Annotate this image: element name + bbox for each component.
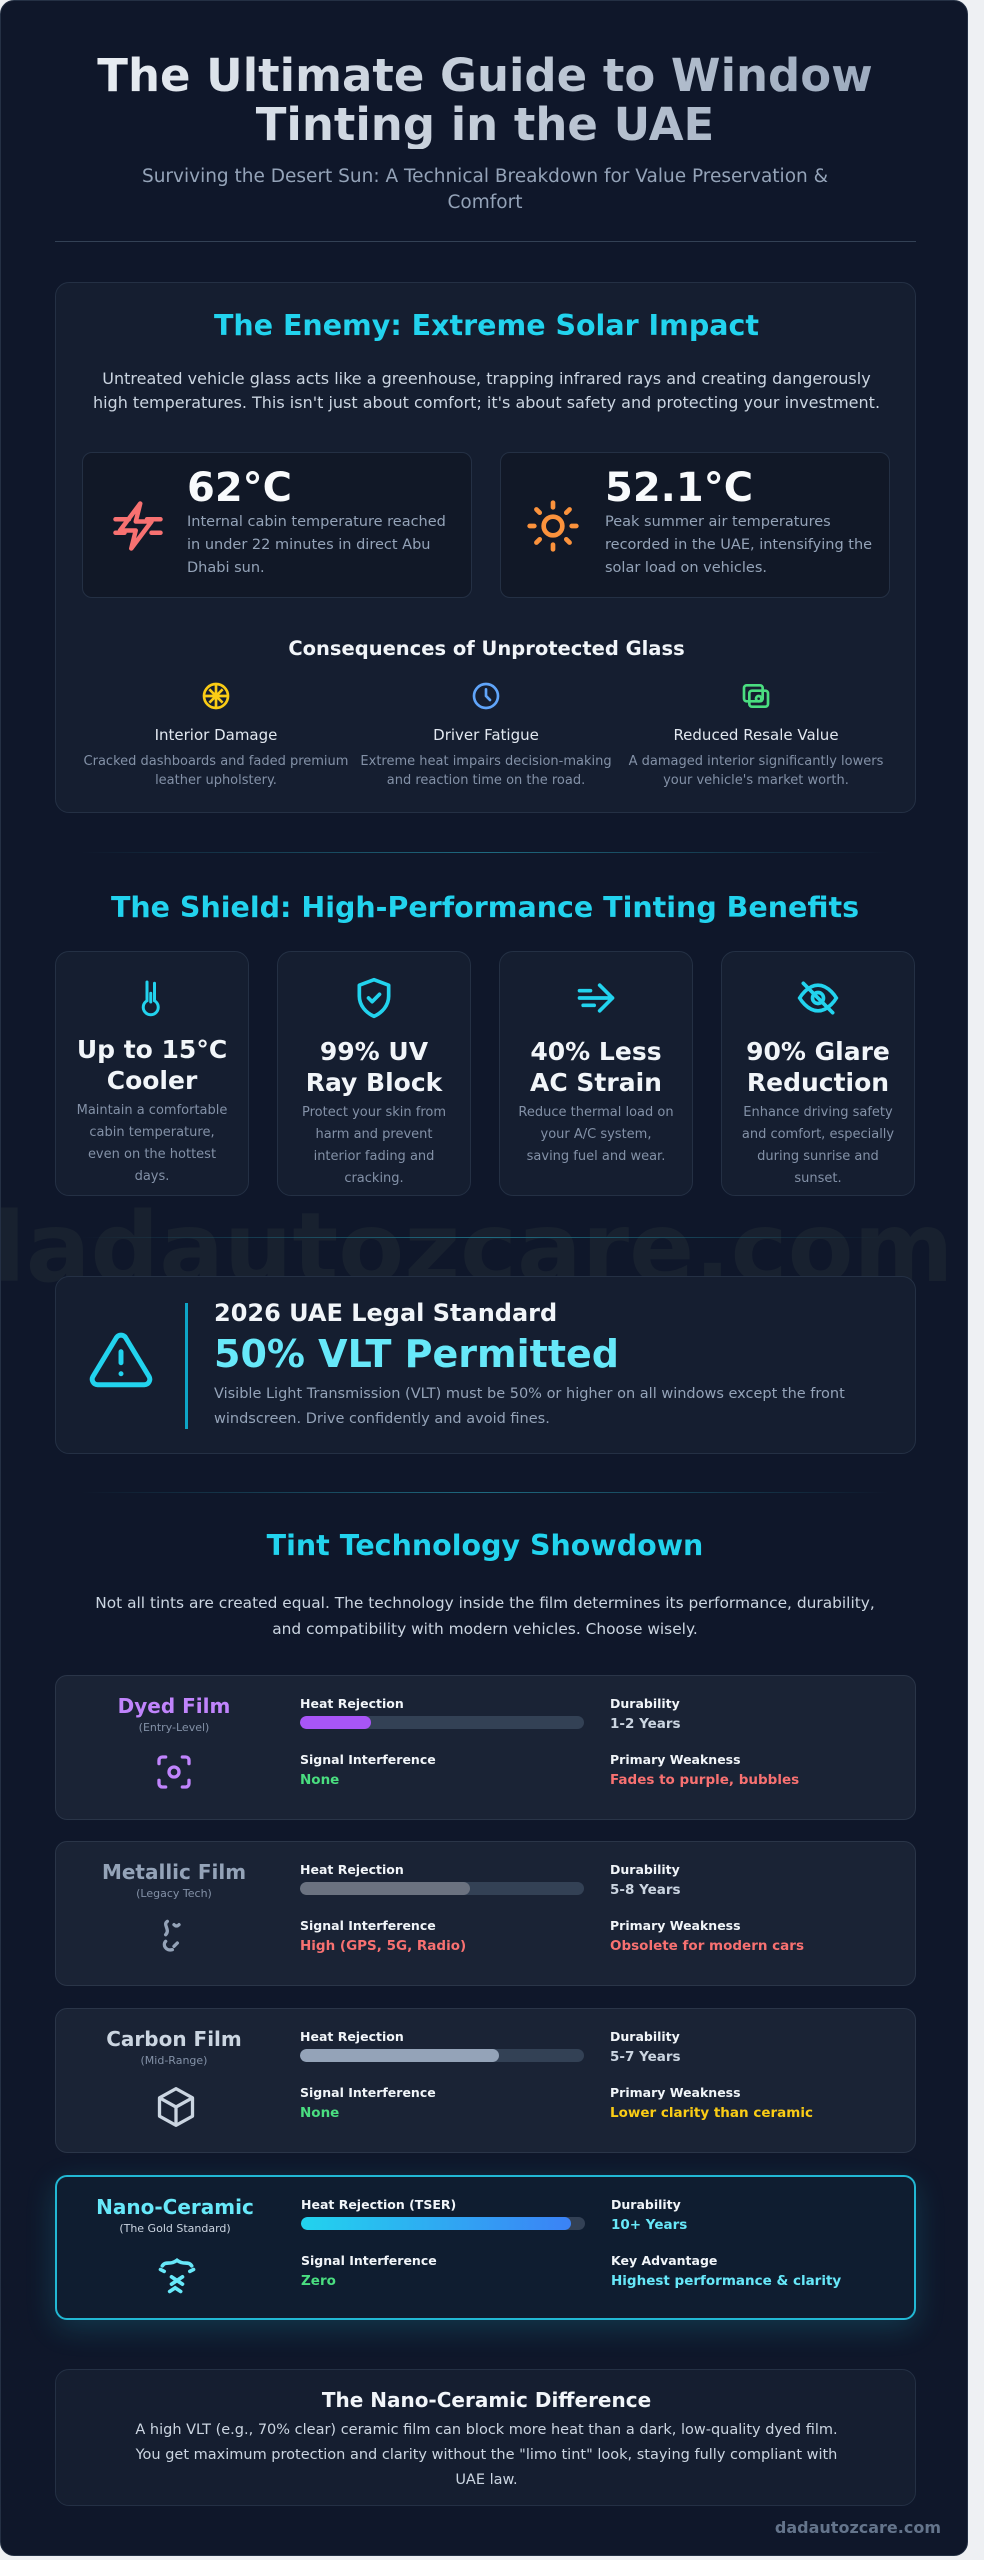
row: metallic film	[55, 1841, 916, 1986]
row: carbon film: Heat Rejection	[300, 2029, 404, 2044]
row: nano-ceramic: Highest performance & clarity	[611, 2273, 841, 2289]
benefit: ac: AC Strain	[530, 1068, 662, 1097]
row: metallic film: Heat Rejection	[300, 1862, 404, 1877]
row: carbon film: 5-7 Years	[610, 2049, 681, 2065]
row: nano-ceramic: Signal Interference	[301, 2253, 437, 2268]
row: dyed film	[55, 1675, 916, 1820]
row: dyed film: Dyed Film	[118, 1694, 230, 1718]
row: metallic film: Metallic Film	[102, 1860, 246, 1884]
stat: 62C: Internal cabin temperature reached in under 22 minutes in direct Abu Dhabi sun.	[187, 514, 446, 576]
row: carbon film	[55, 2008, 916, 2153]
benefit: glare: Reduction	[747, 1068, 889, 1097]
row: carbon film: Primary Weakness	[610, 2085, 741, 2100]
benefit: uv: Protect your skin from harm and prevent interior fading and cracking.	[302, 1105, 446, 1186]
item: driver fatigue	[360, 682, 612, 788]
item: driver fatigue: Driver Fatigue	[433, 726, 539, 744]
item: driver fatigue: Extreme heat impairs decision-making and reaction time on the road.	[360, 754, 612, 788]
row: dyed film: Heat Rejection	[300, 1696, 404, 1711]
benefit: ac: 40% Less	[530, 1037, 662, 1066]
benefit: uv: Ray Block	[306, 1068, 442, 1097]
row: carbon film: Carbon Film	[106, 2027, 242, 2051]
row: nano-ceramic: 10+ Years	[611, 2217, 687, 2233]
icon: heat bolt	[113, 501, 163, 551]
panel: legal standard	[55, 1276, 916, 1454]
title	[1, 51, 969, 149]
row: carbon film: Durability	[610, 2029, 680, 2044]
item: interior damage	[84, 682, 348, 788]
row: dyed film: Fades to purple, bubbles	[610, 1772, 799, 1788]
row: nano-ceramic: Key Advantage	[611, 2253, 717, 2268]
subtitle: Surviving the Desert Sun: A Technical Breakdown for Value Preservation & Comfort	[142, 166, 828, 213]
row: carbon film: (Mid-Range)	[141, 2054, 207, 2067]
benefit: uv	[277, 951, 471, 1196]
benefit: glare: 90% Glare	[746, 1037, 890, 1066]
benefit: cooler: Cooler	[107, 1066, 197, 1095]
title: Tinting in the UAE	[256, 98, 714, 151]
benefit: glare	[721, 951, 915, 1196]
item: interior damage: Cracked dashboards and faded premium leather upholstery.	[84, 754, 348, 788]
stat: 52.1C	[500, 452, 890, 598]
row: metallic film: Obsolete for modern cars	[610, 1938, 804, 1954]
title: The Ultimate Guide to Window	[97, 49, 873, 102]
row: nano-ceramic: (The Gold Standard)	[119, 2222, 231, 2235]
row: dyed film: 1-2 Years	[610, 1716, 681, 1732]
item: interior damage: Interior Damage	[155, 726, 277, 744]
icon: sun	[527, 500, 579, 552]
legal text	[214, 1299, 845, 1427]
heading: the shield: The Shield: High-Performance Tinting Benefits	[111, 891, 859, 924]
footer brand: dadautozcare.com	[775, 2518, 941, 2537]
heading: showdown: Tint Technology Showdown	[267, 1529, 703, 1562]
row: nano-ceramic: Nano-Ceramic	[96, 2195, 254, 2219]
benefit: cooler: Up to 15°C	[77, 1035, 227, 1064]
benefit: ac: saving fuel and wear.	[527, 1149, 665, 1164]
item: resale value	[628, 684, 883, 788]
row: nano-ceramic: Heat Rejection (TSER)	[301, 2197, 456, 2212]
row: dyed film: Primary Weakness	[610, 1752, 741, 1767]
row: carbon film: None	[300, 2105, 339, 2121]
panel: nano-ceramic difference: A high VLT (e.g., 70% clear) ceramic film can block more heat than a dark, low-quality dyed film. You get maximum protection and clarity without the "limo tint" look, staying fully compliant with UAE law.	[135, 2422, 838, 2488]
legal text: Visible Light Transmission (VLT) must be 50% or higher on all windows except the front windscreen. Drive confidently and avoid fines.	[214, 1386, 845, 1427]
row: metallic film: (Legacy Tech)	[136, 1887, 212, 1900]
panel: the enemy	[55, 282, 916, 813]
intro text	[93, 369, 880, 412]
intro text: Untreated vehicle glass acts like a greenhouse, trapping infrared rays and creating dangerously	[102, 369, 871, 388]
row: carbon film: Lower clarity than ceramic	[610, 2105, 813, 2121]
row: metallic film: Primary Weakness	[610, 1918, 741, 1933]
legal text: 2026 UAE Legal Standard	[214, 1299, 557, 1327]
benefit: ac: Reduce thermal load on your A/C system,	[518, 1105, 674, 1142]
row: dyed film: None	[300, 1772, 339, 1788]
stat: 62C: 62°C	[187, 465, 292, 511]
row: dyed film: (Entry-Level)	[139, 1721, 209, 1734]
showdown intro: Not all tints are created equal. The technology inside the film determines its performance, durability,	[95, 1594, 875, 1612]
intro text: high temperatures. This isn't just about comfort; it's about safety and protecting your investment.	[93, 393, 880, 412]
row: nano-ceramic: Zero	[301, 2273, 336, 2289]
stat: 62C	[82, 452, 472, 598]
row: carbon film: Signal Interference	[300, 2085, 436, 2100]
icon: warning	[90, 1332, 152, 1388]
row: dyed film: Durability	[610, 1696, 680, 1711]
row: metallic film: High (GPS, 5G, Radio)	[300, 1938, 466, 1954]
row: nano-ceramic: Durability	[611, 2197, 681, 2212]
item: resale value: A damaged interior significantly lowers your vehicle's market worth.	[629, 754, 883, 788]
row: dyed film: Signal Interference	[300, 1752, 436, 1767]
item: resale value: Reduced Resale Value	[673, 726, 839, 744]
row: metallic film: 5-8 Years	[610, 1882, 681, 1898]
benefit: uv: 99% UV	[320, 1037, 428, 1066]
panel: nano-ceramic difference	[55, 2369, 916, 2506]
stat: 52.1C: 52.1°C	[605, 465, 753, 511]
row: metallic film: Durability	[610, 1862, 680, 1877]
showdown intro	[95, 1594, 875, 1638]
benefit: cooler	[55, 951, 249, 1196]
panel: nano-ceramic difference: The Nano-Ceramic Difference	[322, 2388, 651, 2412]
stat: 52.1C: Peak summer air temperatures recorded in the UAE, intensifying the solar load on vehicles.	[605, 514, 872, 576]
subheading: Consequences of Unprotected Glass	[288, 637, 685, 660]
row: metallic film: Signal Interference	[300, 1918, 436, 1933]
benefit: cooler: Maintain a comfortable cabin temperature, even on the hottest days.	[77, 1103, 227, 1184]
benefit: glare: Enhance driving safety and comfort, especially during sunrise and sunset.	[742, 1105, 894, 1186]
showdown intro: and compatibility with modern vehicles. Choose wisely.	[272, 1620, 698, 1638]
heading: The Enemy: Extreme Solar Impact	[214, 309, 759, 342]
row: nano-ceramic	[55, 2175, 916, 2320]
benefit: ac	[499, 951, 693, 1196]
legal text: 50% VLT Permitted	[214, 1332, 619, 1376]
